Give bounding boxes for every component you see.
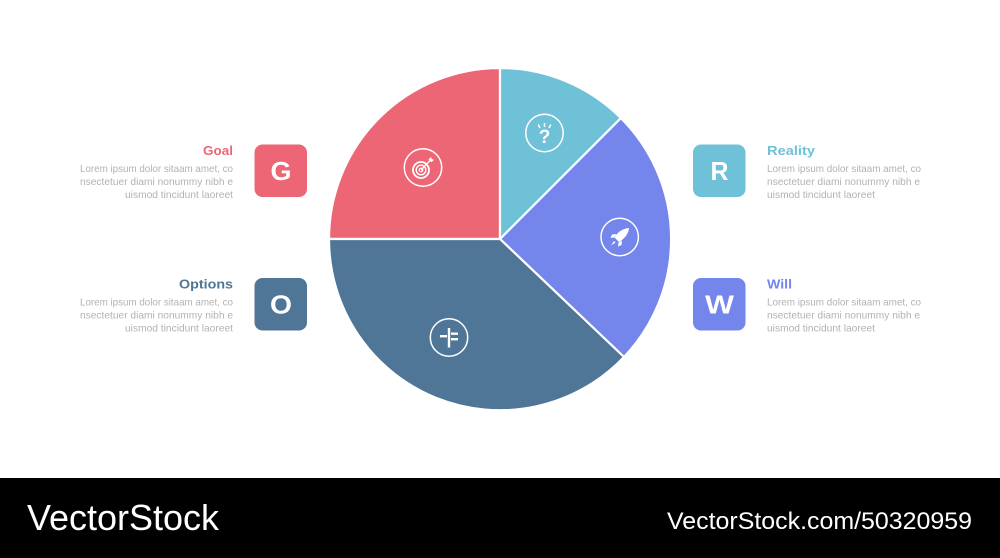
text block: options: Lorem ipsum dolor sitaam amet, co xyxy=(80,296,233,308)
text block: options: nsectetuer diami nonummy nibh e xyxy=(80,310,233,322)
icon: target xyxy=(404,149,442,186)
text block: reality: uismod tincidunt laoreet xyxy=(767,189,875,201)
text block: options: uismod tincidunt laoreet xyxy=(125,322,233,334)
badge: G: G xyxy=(270,156,292,186)
text block: goal: Goal xyxy=(203,143,233,158)
badge: G xyxy=(254,144,307,197)
badge: R: R xyxy=(710,156,729,186)
badge: W: W xyxy=(705,290,735,320)
text block: will: Will xyxy=(767,276,792,292)
text block: will xyxy=(767,276,921,334)
pie slice: options xyxy=(329,239,624,410)
footer bar xyxy=(0,478,1000,558)
icon: question mark: ? xyxy=(539,127,550,148)
text block: will: nsectetuer diami nonummy nibh e xyxy=(767,310,920,322)
text block: reality: Reality xyxy=(767,143,816,158)
pie chart xyxy=(329,68,671,410)
icon: rocket xyxy=(601,218,638,256)
text block: reality xyxy=(767,143,921,201)
text block: options: Options xyxy=(179,276,233,292)
badge: R xyxy=(693,144,746,197)
icon: question mark xyxy=(526,114,563,152)
icon: signpost xyxy=(430,319,468,356)
footer logo: VectorStock xyxy=(27,497,220,538)
text block: will: Lorem ipsum dolor sitaam amet, co xyxy=(767,296,921,308)
text block: goal: uismod tincidunt laoreet xyxy=(125,189,233,201)
text block: options xyxy=(80,276,233,334)
badge: O xyxy=(254,278,307,330)
text block: goal: Lorem ipsum dolor sitaam amet, co xyxy=(80,163,233,175)
pie slice: reality xyxy=(500,68,621,239)
text block: goal: nsectetuer diami nonummy nibh e xyxy=(80,176,233,188)
pie slice: goal xyxy=(329,68,500,239)
pie slice: will xyxy=(500,118,671,357)
text block: goal xyxy=(80,143,233,201)
text block: will: uismod tincidunt laoreet xyxy=(767,322,875,334)
text block: reality: Lorem ipsum dolor sitaam amet, co xyxy=(767,163,921,175)
badge: O: O xyxy=(270,290,292,320)
badge: W xyxy=(693,278,746,330)
footer url: VectorStock.com/50320959 xyxy=(667,508,972,535)
text block: reality: nsectetuer diami nonummy nibh e xyxy=(767,176,920,188)
